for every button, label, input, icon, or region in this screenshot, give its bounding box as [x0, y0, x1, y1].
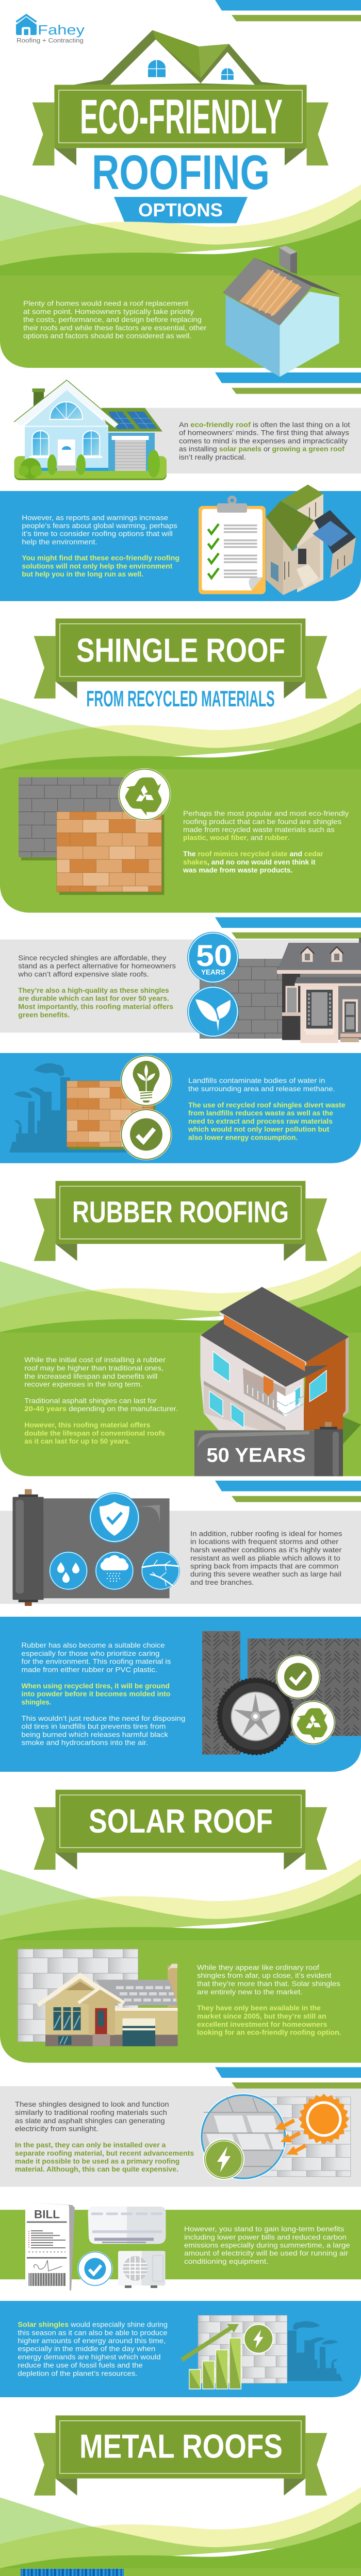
- text: landfills paragraphs: from landfills reduces waste as well as the: [188, 1109, 333, 1117]
- text: long-term benefits: emissions especially during summertime, a large: [184, 2241, 350, 2249]
- icon: 50 years badge: [187, 932, 239, 984]
- icon: solar shingles: [18, 1949, 138, 2042]
- text: shingle roof paragraphs: roofing product that can be found are shingles: [183, 817, 341, 825]
- text: recycled tires paragraphs: shingles.: [22, 1698, 52, 1706]
- panel: metal roofs: [0, 2568, 361, 2576]
- text: long-term benefits: conditioning equipment.: [184, 2257, 268, 2265]
- text: global warming paragraph: [22, 513, 179, 578]
- text: rubber roofing paragraphs: While the initial cost of installing a rubber: [24, 1355, 166, 1364]
- icon: 50 years badge: 50: [196, 939, 232, 973]
- icon: rubber roll 50 years: [194, 1422, 343, 1476]
- arrow: growth: [180, 2324, 239, 2362]
- text: recycled tires paragraphs: being burned which releases harmful black: [22, 1730, 169, 1738]
- text: introduction: their roofs and while these factors are essential, other: [23, 324, 207, 332]
- icon: electricity badge: [243, 2324, 273, 2354]
- text: rubber roofing paragraphs: the increased lifespan and benefits will: [24, 1372, 157, 1380]
- icon: open roof house with exposed rafters: [223, 246, 342, 377]
- text: solar roof paragraphs: are entirely new to the market.: [197, 1988, 303, 1996]
- text: how solar shingles work: In the past, they can only be installed over a: [15, 2141, 166, 2149]
- text: affordable shingles: They’re also a high-quality as these shingles: [18, 986, 169, 994]
- panel: introduction: [0, 276, 361, 368]
- icon: recycle badge: [291, 1701, 335, 1745]
- text: storm resistance paragraph: [190, 1529, 342, 1586]
- heading: OPTIONS tab: [114, 197, 248, 223]
- text: rubber roofing paragraphs: Traditional asphalt shingles can last for: [24, 1396, 157, 1404]
- text: landfills paragraphs: which would not only lower pollution but: [188, 1125, 330, 1133]
- icon: tire: [218, 1679, 294, 1755]
- icon: rubber tile samples: [202, 1631, 361, 1755]
- icon: rain drops badge: [49, 1551, 88, 1590]
- text: eco-friendly roof paragraph: An eco-friendly roof is often the last thing on a lot: [179, 420, 350, 429]
- text: affordable shingles: Since recycled shingles are affordable, they: [18, 954, 166, 962]
- panel: storm resistance: [0, 1489, 361, 1606]
- text: landfills paragraphs: need to extract and process raw materials: [188, 1117, 333, 1125]
- text: energy production: especially in the middle of the day when: [18, 2345, 155, 2353]
- text: introduction: [23, 299, 207, 340]
- text: recycled tires paragraphs: Rubber has also become a suitable choice: [22, 1641, 165, 1649]
- icon: factory silhouette: [9, 1063, 129, 1153]
- decorative bars: [215, 372, 361, 394]
- panel: rubber roofing: [0, 1333, 361, 1476]
- text: introduction: at some point. Homeowners typically take priority: [23, 308, 194, 316]
- text: how solar shingles work: separate roofing material, but recent advancements: [15, 2149, 194, 2157]
- panel: affordable shingles: [0, 932, 361, 1043]
- text: how solar shingles work: [15, 2100, 194, 2173]
- text: global warming paragraph: it’s time to consider roofing options that will: [22, 530, 173, 538]
- text: shingle roof paragraphs: shakes, and no one would even think it: [183, 858, 316, 866]
- icon: factory silhouette: [288, 2321, 342, 2381]
- text: storm resistance paragraph: during this severe weather such as large hail: [190, 1570, 341, 1578]
- text: how solar shingles work: made it possible to be used as a primary roofing: [15, 2157, 179, 2165]
- heading: rubber roofing: [34, 1181, 327, 1261]
- text: storm resistance paragraph: and tree branches.: [190, 1578, 254, 1586]
- text: landfills paragraphs: Landfills contaminate bodies of water in: [188, 1076, 325, 1084]
- decorative hills: [0, 688, 361, 782]
- text: recycled tires paragraphs: for the environment. This roofing material is: [22, 1657, 171, 1666]
- icon: bricks: [67, 1081, 155, 1149]
- text: global warming paragraph: solutions will not only help the environment: [22, 562, 173, 570]
- heading: ROOFING: ROOFING: [92, 145, 270, 200]
- text: global warming paragraph: You might find that these eco-friendly roofing: [22, 553, 179, 562]
- logo: Fahey Roofing + Contracting: Fahey: [38, 23, 85, 38]
- text: solar roof paragraphs: While they appear like ordinary roof: [197, 1963, 319, 1971]
- icon: blue house with solar panels: [14, 380, 167, 480]
- icon: magnified shingles: [200, 2093, 287, 2180]
- icon: light bulb with plant badge: [121, 1055, 172, 1107]
- text: how solar shingles work: similarly to traditional roofing materials such: [15, 2108, 167, 2116]
- icon: shield badge: [89, 1492, 140, 1543]
- heading: solar roof: [34, 1790, 327, 1870]
- icon: shingle samples: [19, 777, 164, 895]
- text: shingle roof paragraphs: was made from waste products.: [183, 866, 292, 874]
- text: affordable shingles: [18, 954, 176, 1019]
- decorative bars: [215, 917, 361, 939]
- text: storm resistance paragraph: resistant as well as pliable which allows it to: [190, 1554, 340, 1562]
- text: shingle roof paragraphs: [183, 809, 349, 874]
- text: recycled tires paragraphs: made from either rubber or PVC plastic.: [22, 1665, 157, 1673]
- text: storm resistance paragraph: spring back from impacts that are common: [190, 1562, 338, 1570]
- heading: shingle roof from recycled materials: SHINGLE ROOF: [76, 632, 285, 669]
- text: energy production: energy demands are highest which would: [18, 2353, 161, 2361]
- icon: tan house with solar roof: [37, 1964, 178, 2046]
- decorative bar: [215, 2067, 361, 2078]
- title: eco-friendly roofing options: [32, 30, 329, 223]
- banner ribbon: [32, 85, 329, 165]
- text: recycled tires paragraphs: When using recycled tires, it will be ground: [22, 1682, 170, 1690]
- text: landfills paragraphs: the surrounding area and release methane.: [188, 1084, 335, 1093]
- decorative hills: [0, 2487, 361, 2576]
- icon: checklist clipboard: [199, 496, 266, 594]
- text: recycled tires paragraphs: smoke and hydrocarbons into the air.: [22, 1738, 148, 1747]
- text: long-term benefits: [184, 2225, 350, 2265]
- icon: 50 years badge: YEARS: [201, 968, 225, 976]
- icon: power bill: BILL: [34, 2208, 60, 2221]
- text: eco-friendly roof paragraph: isn’t really practical.: [179, 453, 246, 461]
- text: recycled tires paragraphs: old tires in landfills but prevents tires from: [22, 1722, 166, 1731]
- text: rubber roofing paragraphs: recover expenses in the long term.: [24, 1380, 142, 1388]
- heading: solar roof: SOLAR ROOF: [89, 1802, 273, 1840]
- text: how solar shingles work: These shingles designed to look and function: [15, 2100, 169, 2108]
- text: rubber roofing paragraphs: as it can last for up to 50 years.: [24, 1437, 130, 1445]
- text: landfills paragraphs: The use of recycled roof shingles divert waste: [188, 1100, 346, 1109]
- text: long-term benefits: including lower power bills and reduced carbon: [184, 2233, 347, 2241]
- text: storm resistance paragraph: In addition, rubber roofing is ideal for homes: [190, 1529, 342, 1537]
- text: how solar shingles work: electricity from sunlight.: [15, 2125, 99, 2133]
- text: landfills paragraphs: [188, 1076, 346, 1141]
- text: rubber roofing paragraphs: 20-40 years depending on the manufacturer.: [24, 1404, 178, 1413]
- icon: tree branch badge: [141, 1551, 180, 1590]
- decorative hills: [0, 1859, 361, 1953]
- panel: shingle roof: [0, 768, 361, 913]
- panel: how solar shingles work: [0, 2082, 361, 2187]
- icon: isometric building with rubber roof: [200, 1287, 361, 1444]
- text: solar roof paragraphs: shingles from afar, up close, it’s evident: [197, 1971, 332, 1979]
- text: storm resistance paragraph: in locations with frequent storms and other: [190, 1537, 339, 1546]
- icon: electricity badge: [203, 2139, 244, 2180]
- text: solar roof paragraphs: looking for an eco-friendly roofing option.: [197, 2028, 341, 2036]
- icon: solar shingles: [198, 2315, 287, 2383]
- icon: grey house with slate shingles: [200, 938, 361, 1043]
- icon: check badge: [276, 1655, 320, 1699]
- heading: rubber roofing: RUBBER ROOFING: [72, 1195, 289, 1229]
- text: energy production: higher amounts of energy around this time,: [18, 2336, 166, 2345]
- text: global warming paragraph: However, as reports and warnings increase: [22, 513, 168, 521]
- text: storm resistance paragraph: harsh weather conditions as it’s highly water: [190, 1546, 342, 1554]
- decorative hills: [0, 184, 361, 278]
- icon: solar shingles wall: [233, 2097, 351, 2177]
- panel: recycled tires: [0, 1617, 361, 1772]
- icon: leaf badge: [187, 986, 239, 1038]
- text: solar roof paragraphs: They have only been available in the: [197, 2004, 321, 2012]
- text: shingle roof paragraphs: plastic, wood fiber, and rubber.: [183, 834, 290, 842]
- text: introduction: Plenty of homes would need a roof replacement: [23, 299, 188, 308]
- panel: solar roof: [0, 1940, 361, 2063]
- text: solar roof paragraphs: that they’re more than that. Solar shingles: [197, 1979, 340, 1988]
- panel: landfills: [0, 1053, 361, 1163]
- text: recycled tires paragraphs: This wouldn’t just reduce the need for disposing: [22, 1714, 185, 1722]
- text: energy production: depletion of the planet’s resources.: [18, 2369, 138, 2377]
- text: recycled tires paragraphs: into powder before it becomes molded into: [22, 1690, 170, 1698]
- text: solar roof paragraphs: excellent investment for homeowners: [197, 2020, 327, 2028]
- heading: shingle roof from recycled materials: [34, 618, 327, 711]
- text: landfills paragraphs: also lower energy consumption.: [188, 1133, 298, 1141]
- heading: OPTIONS tab: OPTIONS: [138, 199, 223, 221]
- icon: hail cloud badge: [95, 1551, 134, 1590]
- icon: rubber roll 50 years: 50 YEARS: [206, 1445, 306, 1467]
- text: recycled tires paragraphs: [22, 1641, 185, 1747]
- text: long-term benefits: amount of electricity will be used for running air: [184, 2249, 348, 2257]
- decorative hills: [0, 1251, 361, 1345]
- icon: house roof above the banner: [74, 30, 290, 85]
- icon: check badge: [121, 1109, 172, 1160]
- text: energy production: [18, 2320, 168, 2377]
- text: introduction: the costs, performance, and design before replacing: [23, 315, 202, 324]
- icon: rubber roll: [12, 1489, 170, 1606]
- icon: air conditioner outdoor unit: [118, 2251, 165, 2288]
- text: recycled tires paragraphs: especially for those who prioritize caring: [22, 1649, 159, 1657]
- text: global warming paragraph: people’s fears about global warming, perhaps: [22, 521, 177, 530]
- icon: sun: [289, 2084, 359, 2154]
- text: energy production: Solar shingles would especially shine during: [18, 2320, 168, 2329]
- text: eco-friendly roof paragraph: as installing solar panels or growing a green roof: [179, 445, 344, 453]
- text: introduction: options and factors should be considered as well.: [23, 331, 192, 340]
- text: solar roof paragraphs: [197, 1963, 341, 2036]
- text: shingle roof paragraphs: made from recycled waste materials such as: [183, 825, 335, 834]
- text: solar roof paragraphs: market since 2005, but they’re still an: [197, 2012, 326, 2020]
- panel: long-term benefits: [0, 2203, 361, 2291]
- text: eco-friendly roof paragraph: of homeowners’ minds. The first thing that always: [179, 428, 349, 436]
- icon: power bill: [25, 2203, 75, 2291]
- text: rubber roofing paragraphs: double the lifespan of conventional roofs: [24, 1429, 165, 1437]
- text: rubber roofing paragraphs: [24, 1355, 178, 1445]
- panel: energy production: [0, 2301, 361, 2397]
- text: how solar shingles work: material. Although, this can be quite expensive.: [15, 2165, 178, 2173]
- panel: eco-friendly roof: [14, 380, 361, 480]
- text: long-term benefits: However, you stand to gain long-term benefits: [184, 2225, 344, 2233]
- logo: Fahey Roofing + Contracting: [16, 15, 85, 44]
- icon: recycle badge: [118, 768, 171, 821]
- panel: global warming: [0, 484, 361, 601]
- heading: metal roofs: [34, 2415, 327, 2496]
- icon: check badge: [77, 2251, 112, 2286]
- icon: metal sheet: [21, 2569, 124, 2576]
- text: shingle roof paragraphs: The roof mimics recycled slate and cedar: [183, 850, 323, 858]
- text: energy production: reduce the use of fossil fuels and the: [18, 2361, 143, 2369]
- text: rubber roofing paragraphs: However, this roofing material offers: [24, 1421, 151, 1429]
- icon: air conditioner indoor unit: [88, 2207, 166, 2244]
- text: how solar shingles work: as slate and asphalt shingles can generating: [15, 2116, 165, 2125]
- text: global warming paragraph: but help you in the long run as well.: [22, 570, 143, 578]
- chart: rising energy bars: [180, 2324, 241, 2389]
- heading: metal roofs: METAL ROOFS: [79, 2427, 283, 2465]
- text: eco-friendly roof paragraph: comes to mind is the expenses and impracticality: [179, 436, 348, 445]
- icon: isometric eco building: [266, 484, 356, 595]
- text: affordable shingles: Most importantly, this roofing material offers: [18, 1003, 173, 1011]
- text: energy production: this season as it can also be able to produce: [18, 2328, 168, 2336]
- text: affordable shingles: green benefits.: [18, 1010, 70, 1019]
- decorative top bars: [215, 0, 361, 21]
- text: global warming paragraph: help the environment.: [22, 538, 97, 546]
- text: affordable shingles: are durable which can last for over 50 years.: [18, 994, 169, 1003]
- decorative bars: [215, 1481, 361, 1502]
- text: shingle roof paragraphs: Perhaps the most popular and most eco-friendly: [183, 809, 349, 817]
- text: eco-friendly roof paragraph: [179, 420, 350, 461]
- text: affordable shingles: stand as a perfect alternative for homeowners: [18, 962, 176, 970]
- icon: sunlight arrows: [275, 2119, 306, 2155]
- text: affordable shingles: who can’t afford expensive slate roofs.: [18, 970, 149, 978]
- text: rubber roofing paragraphs: roof may be higher than traditional ones,: [24, 1364, 163, 1372]
- logo: Fahey Roofing + Contracting: Roofing + Contracting: [17, 38, 84, 44]
